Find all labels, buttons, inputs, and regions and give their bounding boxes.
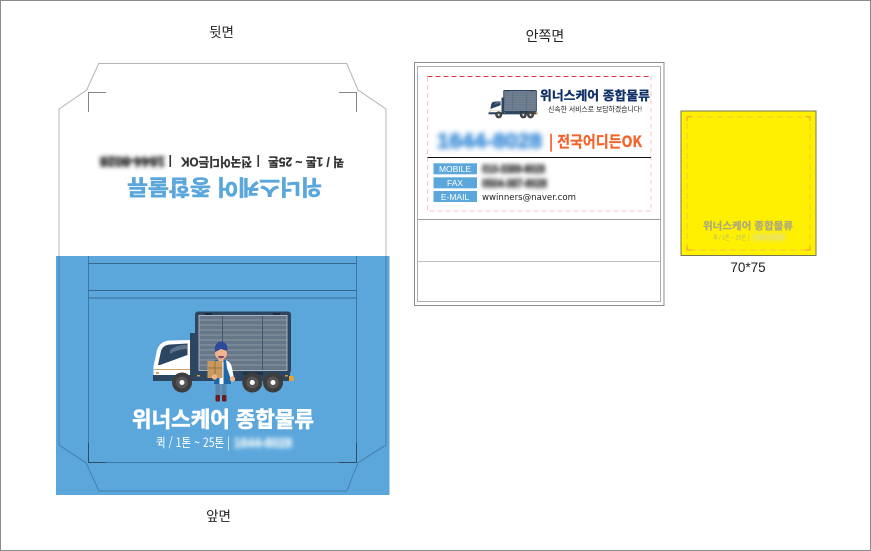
coverage text: | 전국어디든OK [549,130,642,152]
sticker company name: 위너스케어 종합물류 [703,220,793,232]
flipped company name: 위너스케어 종합물류 [127,174,322,198]
dashed safe area [428,77,651,211]
contact row: e-mail [434,191,576,203]
sticker contact line: 퀵 / 1톤 ~ 25톤 | [713,234,749,242]
company name: 위너스케어 종합물류 [540,88,650,103]
contact row: fax: FAX [447,178,463,188]
panel: inner card [414,62,664,306]
panel: envelope back [59,64,386,256]
flipped contact line [100,154,344,170]
flipped contact line: | [168,154,172,168]
contact row: mobile [434,162,545,176]
illustration: courier with parcel [208,342,235,402]
illustration: delivery truck [153,312,294,392]
envelope back flap outline [59,64,386,256]
heading: inner side label: 안쪽면 [526,28,564,44]
dashed cut guide [687,117,810,250]
contact row: e-mail: E-MAIL [441,192,469,202]
envelope front outline [59,256,386,491]
yellow sticker sheet [681,111,816,256]
size label: 70*75 [730,260,766,275]
flipped contact line: 1644-8028 [100,154,165,170]
blue print area [56,256,390,495]
contact row: e-mail: wwinners@naver.com [482,193,576,203]
contact row: mobile: MOBILE [439,164,471,174]
flipped contact line: | [256,154,260,168]
sticker blurred phone: 1644-8028 [752,233,785,242]
card outer frame [414,62,664,306]
contact row: mobile: 010-3389-8028 [482,162,545,176]
company name: 위너스케어 종합물류 [132,408,314,432]
flipped contact line: 퀵 / 1톤 ~ 25톤 [268,154,344,168]
heading: back side label: 뒷면 [209,25,234,40]
small truck logo [489,90,538,118]
contact row: fax [434,176,547,190]
slogan: 신속한 서비스로 보답하겠습니다! [548,104,642,114]
flipped contact line: 전국어디든OK [181,154,252,168]
contact row: fax: 0504-387-8028 [482,176,547,190]
panel: yellow sticker 70x75 [681,111,816,256]
fold lines [88,256,356,462]
panel: envelope front [56,256,390,495]
heading: front side label: 앞면 [206,509,231,524]
blurred phone number: 1644-8028 [234,434,292,450]
card inner frame [418,66,660,302]
contact line: 퀵 / 1톤 ~ 25톤 | [156,432,230,451]
blurred phone number: 1644-8028 [437,130,542,153]
